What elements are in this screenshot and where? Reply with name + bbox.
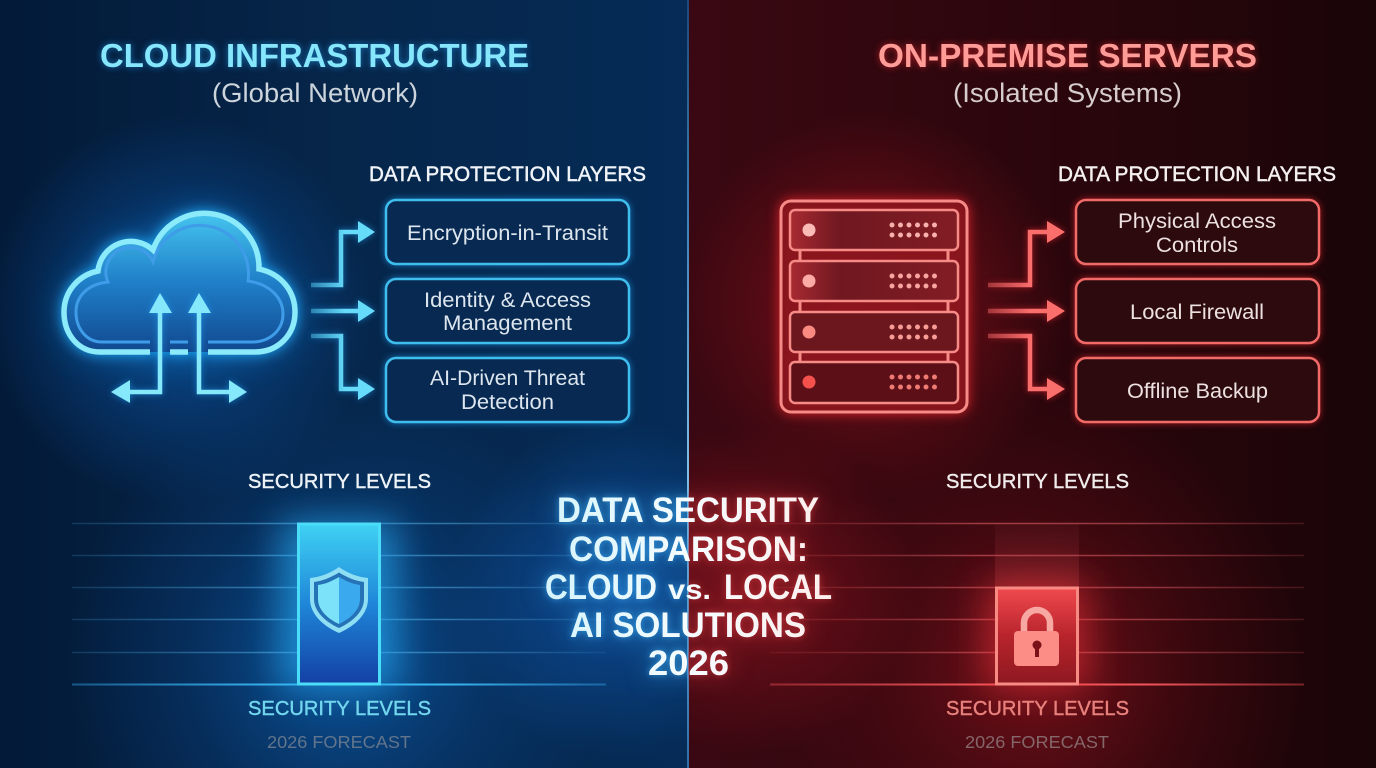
- title: data security comparison: vs.: [668, 574, 711, 605]
- chart title: SECURITY LEVELS: [946, 470, 1129, 493]
- box: encryption in transit: [386, 200, 629, 264]
- heading: on-premise servers: (Isolated Systems): [953, 78, 1182, 108]
- heading: cloud infrastructure: CLOUD INFRASTRUCTURE: [100, 37, 529, 74]
- title: data security comparison: AI SOLUTIONS: [570, 606, 806, 645]
- box: ai-driven threat detection: Detection: [461, 390, 554, 414]
- icon: server rack: [781, 201, 967, 412]
- box: identity and access management: Identity & Access: [424, 288, 591, 312]
- cloud outline: [64, 213, 295, 352]
- server unit 4: [790, 362, 958, 403]
- bar glow: [985, 582, 1089, 688]
- title: data security comparison: LOCAL: [724, 568, 832, 607]
- title: data security comparison: COMPARISON:: [569, 530, 808, 569]
- bar glow: [280, 520, 398, 688]
- box: encryption in transit: Encryption-in-Transit: [407, 221, 608, 245]
- forecast label: 2026 FORECAST: [267, 732, 411, 752]
- title: data security comparison: 2026: [648, 644, 729, 683]
- box: ai-driven threat detection: AI-Driven Threat: [430, 366, 585, 390]
- heading: cloud data protection layers: DATA PROTECTION LAYERS: [369, 162, 646, 186]
- panel: cloud background: [0, 0, 688, 768]
- chart: cloud security level: [72, 470, 606, 752]
- panel: cloud protection layers: [386, 200, 629, 422]
- cloud halo: [64, 213, 295, 352]
- heading: cloud infrastructure: [100, 37, 529, 108]
- bar: [996, 588, 1078, 684]
- title: data security comparison: CLOUD: [545, 568, 657, 607]
- panel: on-premise background: [688, 0, 1376, 768]
- rack connectors: [800, 251, 948, 362]
- box: identity and access management: Management: [443, 311, 572, 335]
- title: data security comparison: DATA SECURITY: [557, 491, 819, 530]
- box: local firewall: [1076, 279, 1319, 343]
- box: local firewall: Local Firewall: [1130, 300, 1264, 324]
- box: physical access controls: Physical Access: [1118, 209, 1276, 233]
- icon: padlock: [1014, 610, 1059, 666]
- heading: on-premise servers: [878, 37, 1257, 108]
- heading: on-premise data protection layers: DATA PROTECTION LAYERS: [1058, 162, 1336, 186]
- panel: on-premise protection layers: [1076, 200, 1319, 422]
- cloud arrows: [111, 293, 247, 403]
- box: offline backup: [1076, 358, 1319, 422]
- heading: cloud infrastructure: (Global Network): [212, 78, 418, 108]
- bar label: SECURITY LEVELS: [946, 697, 1129, 720]
- box: offline backup: Offline Backup: [1127, 379, 1268, 403]
- box: ai-driven threat detection: [386, 358, 629, 422]
- icon: shield: [310, 567, 368, 633]
- chart: on-premise security level: [770, 470, 1304, 752]
- empty bar track: [995, 523, 1079, 587]
- grid: [770, 524, 1304, 652]
- cloud inner line: [76, 225, 283, 342]
- bar: [298, 524, 380, 684]
- icon: cloud with network arrows: [64, 213, 295, 403]
- forecast label: 2026 FORECAST: [965, 732, 1109, 752]
- server unit 1: [790, 210, 958, 250]
- heading: on-premise servers: ON-PREMISE SERVERS: [878, 37, 1257, 74]
- chart title: SECURITY LEVELS: [248, 470, 431, 493]
- box: physical access controls: Controls: [1156, 233, 1238, 257]
- bar label: SECURITY LEVELS: [248, 697, 431, 720]
- box: physical access controls: [1076, 200, 1319, 264]
- arrows: cloud to protection layers: [311, 221, 375, 400]
- server unit 2: [790, 261, 958, 301]
- box: identity and access management: [386, 279, 629, 343]
- arrows: server to protection layers: [988, 221, 1065, 400]
- server unit 3: [790, 312, 958, 352]
- grid: [72, 524, 606, 652]
- title: data security comparison: [545, 491, 832, 683]
